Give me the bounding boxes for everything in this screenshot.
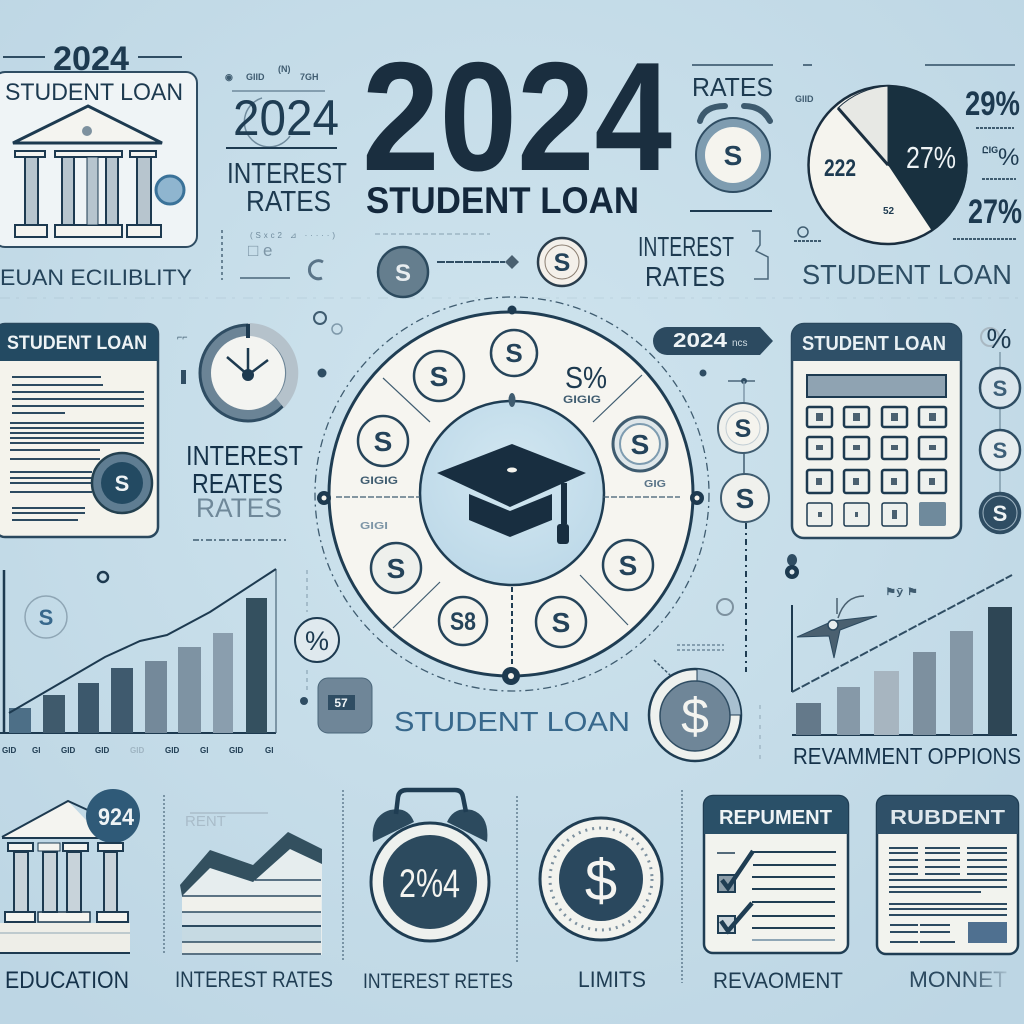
badge: 2024: ncs [732,338,748,349]
block: 2024 interest rates [225,64,347,218]
label: student loan centre: STUDENT LOAN [394,706,630,737]
bar chart: right [785,554,1017,735]
panel: calculator [792,324,961,538]
document lines [10,377,144,520]
block: rates clock: RATES [692,72,773,102]
heading: REPUMENT [719,807,832,829]
pie chart: 52 [883,206,895,217]
checklist [717,851,836,940]
dollar coins on wheel: S [631,429,649,460]
central wheel [315,297,709,691]
dollar coins on wheel [358,330,667,647]
icon: small coin [156,176,184,204]
heading: RUBDENT [890,807,1005,829]
keys [807,407,946,526]
badge: 2024 [653,327,773,355]
spokes [336,375,680,667]
block: 2024 interest rates: ◉ [225,72,233,82]
dollar coins on wheel: S [374,426,392,457]
text: interest rates left: RATES [196,493,282,523]
block: 2024 interest rates: GIID [246,72,265,82]
panel: top-left bank card: STUDENT LOAN [5,79,183,106]
icon: side coins: S [736,483,754,514]
bar chart: right: ⚑ȳ ⚑ [885,587,918,598]
icon: small jar [300,678,372,733]
block: 2024 interest rates: (N) [278,64,290,74]
dollar coins on wheel: S [430,361,448,392]
dollar coins on wheel: S [387,553,405,584]
dollar coins on wheel: S [619,550,637,581]
bottom: alarm clock [343,790,513,993]
icon: wall clock [200,323,298,421]
text: interest rates left [186,440,303,540]
icon: big dollar coin [649,660,741,761]
wheel labels: GIG [644,479,666,490]
pie chart: 27% [906,140,956,175]
icons: calculator side coins: S [993,376,1007,401]
bottom: repayment checklist [682,790,848,993]
wheel labels [360,360,666,532]
dollar coins on wheel: S8 [450,608,476,636]
bottom: limits coin: $ [585,848,617,913]
icon: percent badge: % [305,626,329,656]
icon: bank building [13,106,162,237]
icon: coin [92,453,152,513]
pie chart: 222 [824,155,856,182]
tiny callout text [677,599,760,765]
decorative marks [177,312,342,384]
connector row [375,234,586,297]
bottom: education bank [0,789,140,994]
icons: calculator side coins: S [993,438,1007,463]
icon: small jar: 57 [334,696,348,710]
icons: calculator side coins: S [993,501,1007,526]
wheel labels: GIGI [360,521,388,532]
heading: STUDENT LOAN [802,333,946,355]
axis labels: GI [32,746,40,755]
axis labels: GID [2,746,16,755]
pie side labels: ԸIG [982,145,998,155]
icon: coin [25,596,67,638]
icon: coin: S [115,471,129,496]
axis labels: GI [200,746,208,755]
axis labels: GID [61,746,75,755]
bottom: document [877,796,1018,992]
block: faint note [222,230,335,280]
connector row: S [395,260,411,287]
icon: plane [797,596,877,658]
icon: big dollar coin: $ [681,688,709,744]
axis labels: GID [130,746,144,755]
heading: STUDENT LOAN [7,333,147,354]
label: monnet: MONNET [909,967,1007,992]
bar chart: left [0,569,276,755]
panel: student loan document [0,324,158,537]
axis labels: GID [95,746,109,755]
label: student loan right: STUDENT LOAN [802,259,1012,290]
node dots [317,306,704,685]
connector row: S [554,249,570,277]
display [807,375,946,397]
icon: alarm clock coin: S [724,140,742,171]
pie chart [808,86,968,244]
label: interest rates: INTEREST RATES [175,967,333,992]
text: interest rates left: INTEREST [186,440,303,471]
axis labels: GID [229,746,243,755]
pie side labels: GIID [795,94,814,104]
text: interest rates centre: INTEREST [638,231,734,262]
main title: STUDENT LOAN [366,180,639,221]
block: faint note: (Sxc2 ⊿ ·····) [250,231,335,240]
block: 2024 interest rates: RATES [246,186,331,218]
badge: 2024: 2024 [673,330,728,352]
label: interest rates: INTEREST RETES [363,970,513,993]
panel: top-left bank card [0,40,197,247]
panel: top-left bank card: 2024 [53,40,129,78]
icon: graduation cap [437,444,586,544]
icon: alarm clock coin [696,106,770,192]
bottom: interest chart [164,795,333,992]
block: rates clock [690,65,1015,211]
wheel labels: GIGIG [360,475,398,487]
block: 2024 interest rates: 2024 [233,90,339,146]
text: interest rates centre [638,231,768,292]
bottom: limits coin [517,796,662,992]
icon: side coins: S [735,415,751,443]
icon: percent badge [295,570,339,690]
block: 2024 interest rates: 7GH [300,72,319,82]
axis labels: GID [165,746,179,755]
icon: coin: S [39,605,53,630]
bottom: interest chart: RENT [185,813,226,830]
block: 2024 interest rates: INTEREST [227,158,347,190]
bottom: education bank: 924 [98,804,135,831]
dollar coins on wheel: S [552,607,570,638]
axis labels [2,746,273,755]
bottom: alarm clock: 2%4 [399,862,460,906]
text lines [889,848,1007,942]
main title: 2024 [362,30,672,203]
label: repayment: REVAOMENT [713,968,843,993]
pie side labels [794,85,1022,241]
text: interest rates left: REATES [192,468,283,499]
dollar coins on wheel: S [505,338,523,368]
decorative marks: ⌐⌐ [177,332,188,342]
wheel labels: GIGIG [563,394,601,406]
wheel labels: S% [565,360,607,395]
icons: calculator side coins [980,323,1020,533]
pie side labels: % [998,144,1019,171]
label: education: EDUCATION [5,967,129,994]
label: loan eligibility: EUAN ECILIBLITY [0,265,192,290]
icon: side coins [700,370,769,672]
icons: calculator side coins: % [987,323,1011,354]
axis labels: GI [265,746,273,755]
text: interest rates centre: RATES [645,261,725,292]
block: faint note: □ e [248,241,272,260]
label: limits: LIMITS [578,967,646,992]
